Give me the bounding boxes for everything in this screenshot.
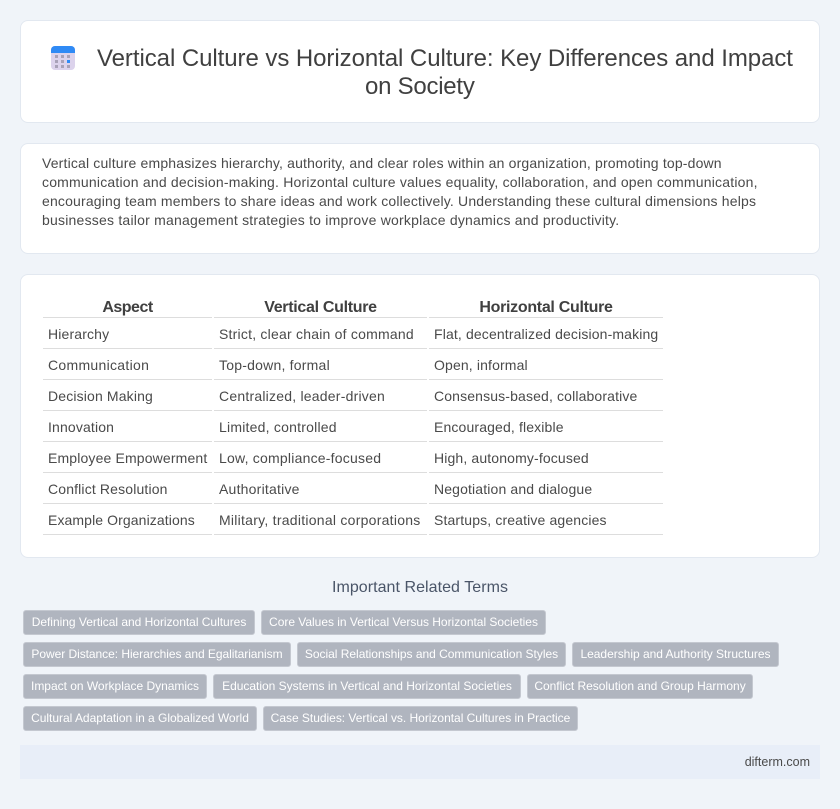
comparison table: Consensus-based, collaborative (434, 388, 637, 404)
comparison table: Military, traditional corporations (219, 512, 421, 528)
related terms tags: Power Distance: Hierarchies and Egalitarianism (31, 647, 283, 661)
related terms tags: Defining Vertical and Horizontal Cultures (32, 615, 246, 629)
comparison table: Horizontal Culture (479, 298, 613, 316)
comparison table: Vertical Culture (264, 298, 377, 316)
comparison table: Open, informal (434, 357, 528, 373)
comparison table: Startups, creative agencies (434, 512, 607, 528)
title (97, 45, 793, 100)
comparison table: Encouraged, flexible (434, 419, 564, 435)
comparison table: Employee Empowerment (48, 450, 207, 466)
text block: introduction (42, 155, 758, 228)
related terms tags: Education Systems in Vertical and Horizontal Societies (222, 679, 512, 693)
text block: introduction: communication and decision-making. Horizontal culture values equality, collaboration, and open communication, (42, 174, 758, 190)
related terms tags: Social Relationships and Communication Styles (305, 647, 558, 661)
comparison table: High, autonomy-focused (434, 450, 589, 466)
title: Vertical Culture vs Horizontal Culture: Key Differences and Impact (97, 45, 793, 72)
comparison table: Hierarchy (48, 326, 109, 342)
title: on Society (365, 73, 475, 100)
heading: related terms: Important Related Terms (332, 579, 508, 596)
panel: introduction (20, 143, 820, 254)
comparison table: Innovation (48, 419, 114, 435)
related terms tags: Case Studies: Vertical vs. Horizontal Cultures in Practice (271, 711, 570, 725)
related terms tags: Leadership and Authority Structures (580, 647, 771, 661)
comparison table (43, 298, 663, 535)
panel: comparison table (20, 274, 820, 558)
comparison table: Low, compliance-focused (219, 450, 381, 466)
comparison table: Communication (48, 357, 149, 373)
comparison table: Centralized, leader-driven (219, 388, 385, 404)
comparison table: Negotiation and dialogue (434, 481, 592, 497)
panel: title card (20, 20, 820, 123)
text block: introduction: encouraging team members to share ideas and work collectively. Understanding these cultural dimensions helps (42, 193, 756, 209)
footer: site name: difterm.com (745, 755, 810, 769)
related terms tags: Impact on Workplace Dynamics (31, 679, 199, 693)
icon: calendar (51, 46, 75, 70)
footer bar (20, 745, 820, 779)
text block: introduction: Vertical culture emphasizes hierarchy, authority, and clear roles within an organization, promoting top-down (42, 155, 722, 171)
comparison table: Top-down, formal (219, 357, 330, 373)
comparison table: Limited, controlled (219, 419, 337, 435)
comparison table: Flat, decentralized decision-making (434, 326, 658, 342)
related terms tags: Core Values in Vertical Versus Horizontal Societies (269, 615, 538, 629)
comparison table: Decision Making (48, 388, 153, 404)
related terms tags: Cultural Adaptation in a Globalized World (31, 711, 249, 725)
related terms tags: Conflict Resolution and Group Harmony (534, 679, 746, 693)
comparison table: Aspect (102, 298, 153, 316)
comparison table: Conflict Resolution (48, 481, 168, 497)
comparison table: Example Organizations (48, 512, 195, 528)
text block: introduction: businesses tailor management strategies to improve workplace dynamics and productivity. (42, 212, 619, 228)
comparison table: Strict, clear chain of command (219, 326, 414, 342)
comparison table: Authoritative (219, 481, 300, 497)
